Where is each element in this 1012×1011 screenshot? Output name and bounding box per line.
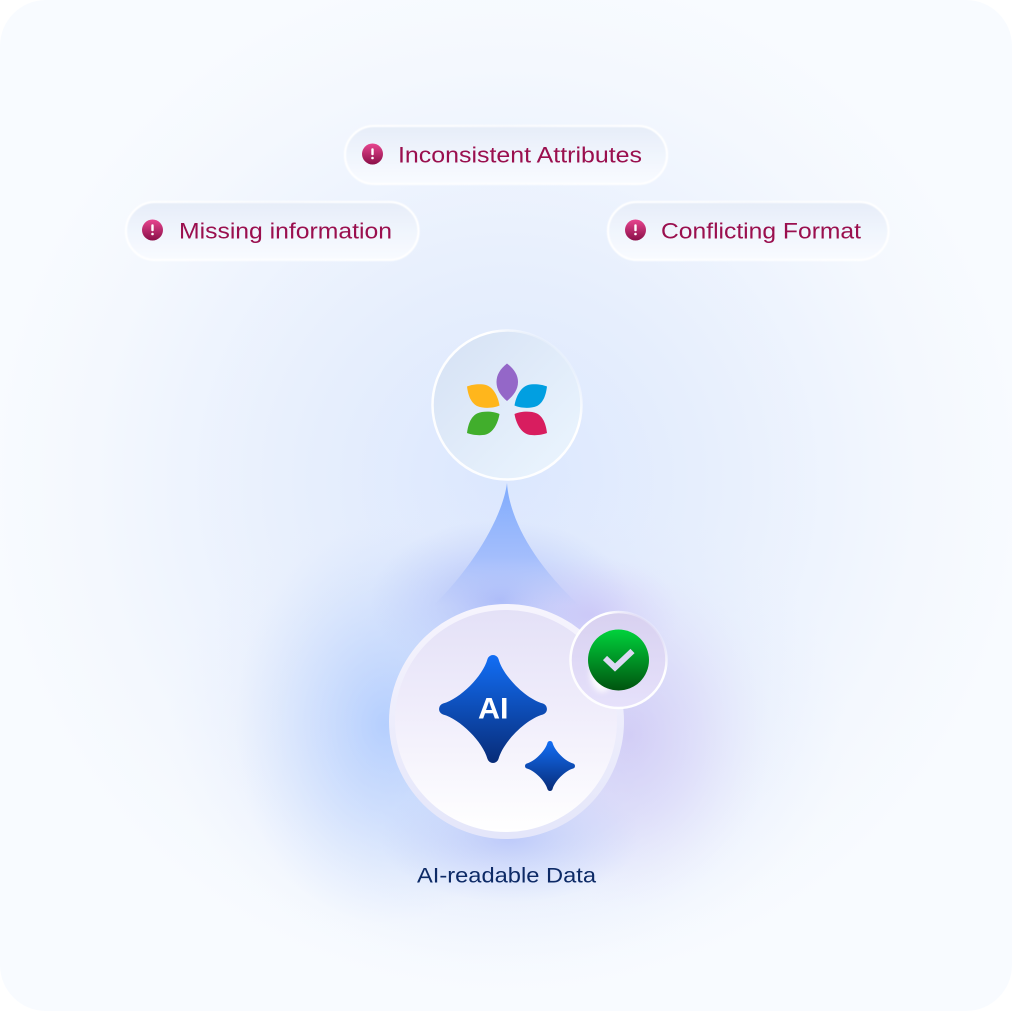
- icon: small sparkle: [525, 741, 575, 791]
- icon: alert: [625, 220, 646, 240]
- icon: large AI sparkle: [439, 655, 547, 763]
- label: Inconsistent Attributes: Inconsistent Attributes: [398, 142, 642, 168]
- pill: Missing information: [126, 202, 418, 260]
- icon: alert: [142, 220, 163, 240]
- AI circle: [389, 604, 624, 839]
- icon: alert: [362, 144, 383, 164]
- icon: large AI sparkle: AI: [478, 692, 508, 726]
- logo circle: [432, 330, 582, 480]
- icon: five petal logo: [467, 364, 547, 435]
- icon: check mark: [605, 651, 632, 668]
- pill: Inconsistent Attributes: [345, 126, 667, 184]
- caption: AI-readable Data: AI-readable Data: [417, 864, 596, 888]
- label: Conflicting Format: Conflicting Format: [661, 218, 861, 244]
- pill: Conflicting Format: [608, 202, 888, 260]
- connector: tapered beam from logo to AI circle: [433, 483, 580, 606]
- badge: green check: [570, 612, 666, 708]
- label: Missing information: Missing information: [179, 218, 392, 244]
